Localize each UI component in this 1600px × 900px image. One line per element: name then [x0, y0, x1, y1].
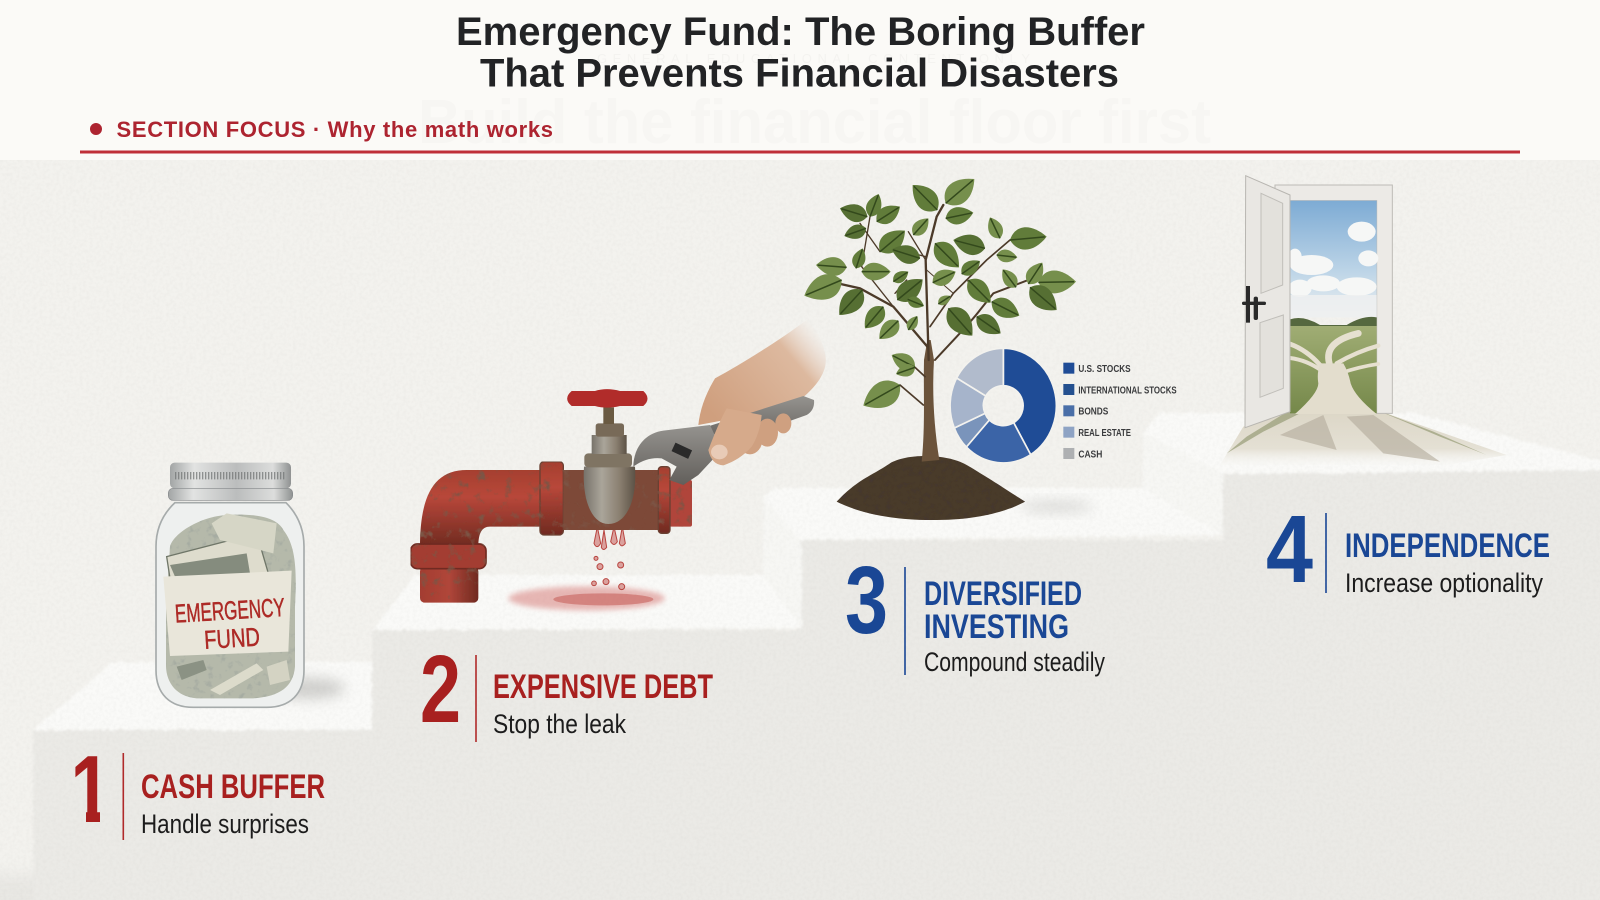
step 2: leaking pipe: [411, 320, 826, 610]
step 1 caption: [75, 753, 324, 840]
tread step 1: [33, 662, 372, 730]
faint watermark heading: Build the financial floor first: [418, 88, 1211, 157]
forked trail: [1290, 333, 1378, 373]
door handle: [1242, 286, 1266, 323]
step heading: DIVERSIFIED: [924, 575, 1082, 613]
chart legend: CASH: [1078, 449, 1102, 460]
step 4: open door with forked path: [1220, 176, 1507, 465]
section focus label: SECTION FOCUS · Why the math works: [116, 117, 553, 142]
jar lid: [170, 463, 291, 488]
tread step 4: [1143, 413, 1600, 474]
ground path on step: [1220, 410, 1507, 465]
stair risers: [33, 468, 1600, 900]
step description: Handle surprises: [141, 809, 309, 839]
sky: [1290, 201, 1377, 317]
step number 2: 2: [420, 636, 461, 743]
jar label text: [174, 592, 287, 657]
side wall step 4: [1143, 432, 1223, 535]
step description: Increase optionality: [1345, 568, 1543, 598]
chart legend: BONDS: [1078, 407, 1108, 418]
valve handwheel: [567, 389, 647, 408]
step number 1: 1: [70, 735, 111, 842]
clouds: [1288, 222, 1378, 317]
title: That Prevents Financial Disasters: [480, 52, 1119, 96]
step heading: INVESTING: [924, 608, 1069, 646]
side wall step 3: [763, 497, 802, 628]
door frame: [1275, 185, 1392, 413]
chart legend: REAL ESTATE: [1078, 428, 1131, 439]
hand fingers: [708, 408, 791, 465]
faint overline text: GENERAL EDUCATIONAL CONTENT ONLY: [597, 51, 1030, 66]
header background: [0, 0, 1600, 160]
leaves: [800, 170, 1076, 417]
hand back: [698, 320, 826, 425]
chart legend: U.S. STOCKS: [1078, 364, 1131, 375]
jar glass: [156, 503, 304, 707]
drips: [592, 527, 625, 590]
valve: [567, 389, 647, 524]
field: [1290, 326, 1377, 413]
door leaf: [1245, 176, 1290, 428]
step heading: EXPENSIVE DEBT: [493, 668, 713, 706]
step number 3: 3: [845, 547, 888, 654]
chart legend: INTERNATIONAL STOCKS: [1078, 385, 1177, 396]
door panels: [1260, 193, 1283, 397]
tree line: [1290, 317, 1377, 326]
title: Emergency Fund: The Boring Buffer: [456, 10, 1145, 54]
step description: Stop the leak: [493, 709, 626, 739]
pipe body: [411, 462, 692, 603]
step 1: emergency fund jar: [156, 463, 345, 707]
trunk and branches: [830, 205, 1047, 462]
step heading: [924, 575, 1082, 646]
jar label text: EMERGENCY: [174, 592, 286, 629]
money inside: [166, 515, 296, 698]
section rule: [80, 150, 1520, 154]
step 2 caption: [420, 636, 713, 743]
soil mound: [837, 456, 1025, 520]
step description: Compound steadily: [924, 647, 1105, 677]
chart legend: [1063, 363, 1177, 460]
title: [456, 10, 1145, 96]
tread step 3: [763, 488, 1223, 540]
step 3 caption: [845, 547, 1105, 677]
wrench: [633, 396, 814, 485]
donut chart: [950, 348, 1056, 463]
step 3: sapling and portfolio chart: [800, 170, 1177, 520]
step 4 caption: [1266, 496, 1550, 603]
step heading: CASH BUFFER: [141, 768, 325, 806]
puddle: [508, 586, 665, 610]
jar label text: FUND: [203, 622, 261, 655]
step number 4: 4: [1266, 496, 1313, 603]
jar label: [163, 571, 292, 656]
tread step 2: [372, 575, 802, 630]
